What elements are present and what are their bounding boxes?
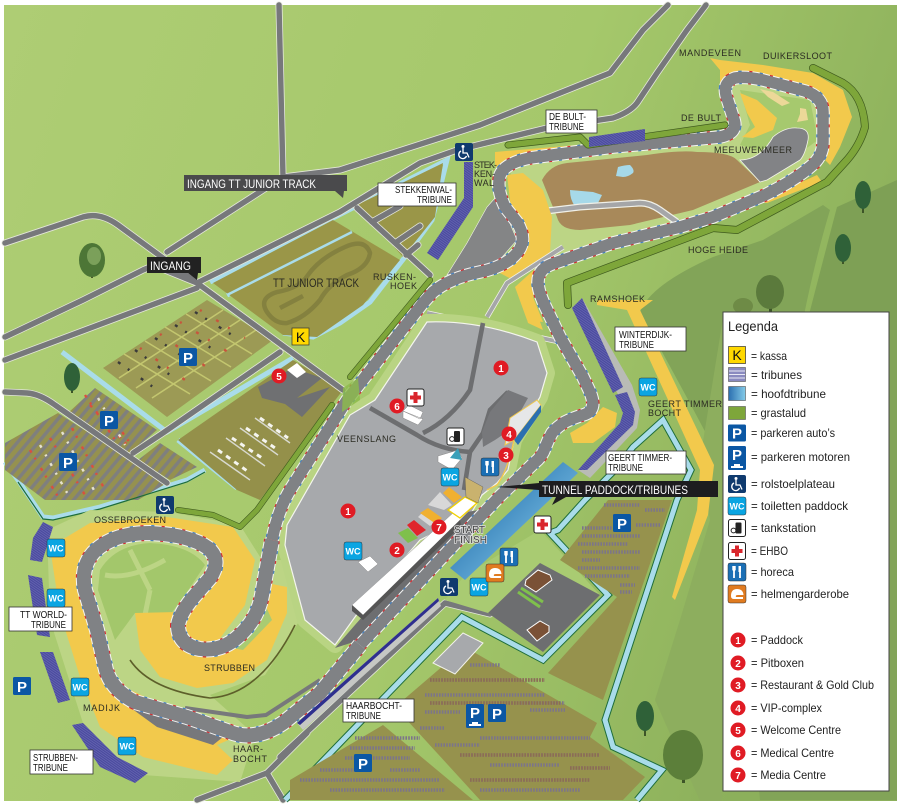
map icons [13,143,657,773]
legend: helmengarderobe [728,585,849,603]
icon: motor parking [466,704,484,728]
icon: WC: WC [48,544,64,554]
label: TT World-tribune: TT WORLD- [20,610,67,621]
label: TT World-tribune: TRIBUNE [31,620,66,631]
welcome centre building [287,363,306,378]
tribune: Stekkenwal [427,162,473,260]
legend: toiletten paddock [728,497,849,515]
yellow: outer [50,517,255,775]
legend: toiletten paddock: = toiletten paddock [751,499,849,513]
tribunes [28,129,645,783]
label: Haarbocht-tribune: TRIBUNE [346,711,381,722]
tower [465,477,483,503]
callout: Tunnel Paddock/Tribunes [497,481,718,505]
canal: left [5,352,293,518]
legend: rolstoelplateau: = rolstoelplateau [751,477,835,491]
legend: kassa: K [732,347,742,363]
callout: Ingang TT Junior Track [184,175,347,198]
welcome centre apron [258,368,330,417]
paddock [285,322,547,648]
legend: parkeren motoren [728,446,850,470]
parking lot west 3 [138,443,197,480]
legend: Medical Centre: = Medical Centre [751,746,834,760]
trees [64,181,871,783]
legend: parkeren auto's: P [732,426,742,442]
marker 2: 2 [394,546,400,557]
tribune: TT World 1 [30,522,53,562]
label: Ramshoek: RAMSHOEK [590,294,645,304]
asphalt Strubben [84,533,360,735]
label: Winterdijk-tribune: TRIBUNE [619,340,654,351]
legend: helmengarderobe: = helmengarderobe [751,587,849,601]
legend: rolstoelplateau [728,475,835,493]
legend: VIP-complex: 4 [735,704,741,715]
legend: horeca: = horeca [751,565,794,579]
lot: Stekkenwal [357,163,443,257]
icon: WC [639,378,657,396]
white building 6 [403,405,423,425]
icon: first aid [407,389,424,406]
label: Start/finish: START [454,525,485,536]
grass banks [178,68,865,527]
icon: parking [179,348,197,367]
road: thin east [427,247,563,342]
lot south-west [290,725,473,800]
tree 5 [756,275,784,313]
label: Meeuwenmeer: MEEUWENMEER [714,145,792,155]
label: Geert Timmer-tribune: TRIBUNE [608,463,643,474]
label: Ossebroeken: OSSEBROEKEN [94,515,166,525]
marker 6: 6 [394,402,400,413]
number markers [272,360,516,558]
hills [640,180,897,801]
marker 1 [340,504,356,518]
icon: parking [100,411,118,430]
legend: Media Centre: 7 [735,771,741,782]
label: Rusken-hoek: HOEK [390,281,417,291]
icon: parking [354,754,372,773]
icon: kassa [292,328,309,345]
cars north [118,312,240,392]
fuel building [438,450,462,470]
legend: Paddock [730,632,804,648]
legend: tribunes: = tribunes [751,368,802,382]
legend: EHBO [728,542,788,560]
icon: WC: WC [472,582,487,592]
tree 6 [636,701,654,736]
icon: wheelchair [440,578,458,596]
label: De Bult-tribune: TRIBUNE [549,122,584,133]
legend: Restaurant and Gold Club: 3 [735,681,741,692]
parking lanes [210,418,290,480]
icon: parking: P [17,679,27,696]
label: Haarbocht-tribune [343,699,414,722]
marker 2 [390,542,404,558]
water [570,165,634,206]
legend: Medical Centre: 6 [735,749,741,760]
legend: kassa: = kassa [751,349,787,363]
legend: grastalud [728,406,806,420]
building brown 2 [527,621,549,641]
callout: Ingang [147,257,201,280]
legend: Paddock: 1 [735,636,741,647]
icon: parking: P [183,350,193,367]
icon: WC: WC [640,382,656,392]
light surround [47,510,300,782]
yellow: Stekkenwal [495,145,578,330]
VIP complex [505,400,541,445]
pit boxes [398,528,418,543]
kerbs [84,77,823,735]
label: Stek-ken-wal: KEN- [474,169,495,179]
yellow: lower [757,175,822,203]
helipad [433,633,483,674]
label: Start/finish: FINISH [454,535,487,546]
callout: Tunnel Paddock/Tribunes: TUNNEL PADDOCK/TRIBUNES [542,483,688,497]
icon: wheelchair [156,496,174,514]
motor clusters east [578,505,665,592]
label: Strubben-tribune: TRIBUNE [33,763,68,774]
sand [760,89,808,122]
tree 3 [855,181,871,213]
icon: parking: P [492,706,502,723]
yellow: north-east [710,58,852,165]
icon: parking [613,514,631,533]
lot: TT Junior track [213,220,400,337]
paddock surround [285,322,547,645]
legend: parkeren auto's [728,424,835,442]
label: Hoge Heide: HOGE HEIDE [688,245,748,255]
marker 4: 4 [506,430,512,441]
wc building [358,556,378,572]
icon: food [500,548,518,566]
icon: WC: WC [72,682,88,692]
label: Haar-bocht: HAAR- [233,744,263,754]
label: Stek-ken-wal: WAL [474,178,494,188]
tribune: Strubben [72,723,148,783]
marker 1: 1 [498,364,504,375]
callout: Ingang TT Junior Track: INGANG TT JUNIOR TRACK [187,177,316,191]
kerbs Strubben [84,533,360,735]
yellow: inner [135,583,287,688]
marker 5 [272,368,286,384]
label: Madijk: MADIJK [83,703,120,713]
icon: parking: P [617,516,627,533]
marker 5: 5 [276,372,282,383]
label: Geert Timmer bocht [648,399,722,418]
green patch [233,600,272,650]
label: TT World-tribune [9,607,72,631]
legend: parkeren motoren: = parkeren motoren [751,450,850,464]
legend: horeca [728,563,794,581]
track road [513,203,677,222]
canal: south-east [285,420,691,800]
legend: Paddock: = Paddock [751,633,804,647]
gray lake Stekkenwal [447,198,517,275]
lot: welcome centre [178,360,343,500]
icon: parking: P [358,756,368,773]
inner streaks [105,550,165,615]
cars west [30,395,135,500]
tree 7 [663,730,703,783]
icon: WC: WC [442,472,458,482]
label: Haarbocht-tribune: HAARBOCHT- [346,701,402,712]
dark bank [130,625,295,698]
icon: wheelchair [455,143,473,161]
lots south-east [290,500,672,800]
tribune: TT World 2 [28,575,50,637]
label: Geert Timmer-tribune [606,451,686,474]
legend: tankstation [728,520,816,536]
restaurant band [487,440,514,490]
pit wedge [120,700,223,745]
icon: WC [47,589,65,607]
label: TT Junior Track: TT JUNIOR TRACK [273,278,359,290]
legend title: Legenda [728,318,778,334]
brown area [542,151,760,230]
tree 1 [79,243,105,278]
icon: fuel [447,428,464,445]
legend: toiletten paddock: WC [730,502,745,512]
label: Veenslang: VEENSLANG [337,434,396,444]
label: De Bult-tribune: DE BULT- [549,112,586,123]
motor clusters south-west [300,738,445,790]
label: Stek-ken-wal: STEK- [474,160,497,170]
icon: WC: WC [346,546,361,556]
label: Geert Timmer bocht: BOCHT [648,408,682,418]
label: Stekkenwal-tribune [378,183,456,206]
icon: kassa: K [296,329,306,345]
label: Mandeveen: MANDEVEEN [679,48,741,58]
icon: WC: WC [48,594,64,604]
icon: first aid [534,516,551,533]
light green inner [740,90,818,160]
icon: food [481,458,499,476]
icon: WC [71,678,89,696]
icon: WC [470,578,488,596]
canal edge west [18,472,205,520]
marker 3 [498,448,514,462]
legend: EHBO: = EHBO [751,544,788,558]
legend: VIP-complex: = VIP-complex [751,701,822,715]
yellow: Geert Timmer [570,407,617,443]
green plaza [445,530,600,652]
label: Geert Timmer-tribune: GEERT TIMMER- [608,453,672,464]
paddock roads [370,323,508,490]
legend: kassa [728,346,787,364]
label: De Bult: DE BULT [681,113,722,123]
icon: helmet [486,564,504,582]
tree 4 [835,234,851,264]
icon: WC: WC [120,742,135,752]
legend: tankstation: = tankstation [751,521,816,535]
tribune labels [9,110,686,774]
infield NE [427,58,852,600]
motor clusters south [420,665,610,790]
marker 6 [390,398,404,414]
legend: hoofdtribune: = hoofdtribune [751,387,826,401]
parked vehicles [218,418,288,473]
icon: WC [344,542,362,560]
yellow: inner [740,93,777,138]
legend: VIP-complex [730,700,822,716]
legend: parkeren motoren: P [732,447,742,464]
icon: WC [118,737,136,755]
icon: parking [13,677,31,696]
icon: parking: P [104,413,114,430]
canal inner strip [227,232,352,295]
pit apron [335,510,478,648]
icon: parking: P [63,455,73,472]
label: Haar-bocht: BOCHT [233,754,268,764]
legend: parkeren auto's: = parkeren auto’s [751,426,835,440]
tree 2 [64,363,80,393]
icon: WC [441,468,459,486]
marker 7 [432,520,446,534]
label: Strubben-tribune: STRUBBEN- [33,753,78,764]
label: Winterdijk-tribune [615,327,686,351]
parking lot west 2 [5,413,167,500]
marker 4 [502,426,516,442]
lot south [395,647,645,800]
media yellow [448,497,477,518]
green steps [518,588,543,607]
roads [5,5,706,800]
tribune: Winterdijk [572,298,640,478]
label: Winterdijk-tribune: WINTERDIJK- [619,330,672,341]
map labels [83,48,832,764]
inner green [98,543,205,640]
label: Duikersloot: DUIKERSLOOT [763,51,832,61]
tribune: TT World 3 [40,652,70,703]
pit building [352,497,477,615]
icon: motor parking: P [470,705,480,722]
marker 1: 1 [345,507,351,518]
legend: tribunes [728,368,802,382]
label: Stekkenwal-tribune: TRIBUNE [417,195,452,206]
icon: parking [488,704,506,723]
label: Rusken-hoek [373,272,417,291]
legend: Pitboxen [730,656,804,670]
legend: Pitboxen: 2 [735,659,741,670]
marker 3: 3 [503,451,509,462]
track [84,77,823,745]
junior track course [264,244,370,323]
lot east [548,500,672,700]
canals and lots [5,160,447,520]
tribune: De Bult [589,129,645,147]
label: Stek-ken-wal [474,160,497,188]
marker 1 [494,360,508,376]
tree 8 [733,298,753,314]
tribune: Geert Timmer [578,392,635,470]
label: Stekkenwal-tribune: STEKKENWAL- [395,185,452,196]
label: Haar-bocht [233,744,268,764]
Strubben infield [47,510,300,782]
label: Rusken-hoek: RUSKEN- [373,272,416,282]
yellow: Ramshoek strip [597,300,714,600]
legend: Pitboxen: = Pitboxen [751,656,804,670]
callout: Ingang: INGANG [150,259,191,273]
main grandstand [450,462,578,580]
legend: Restaurant and Gold Club: = Restaurant & Gold Club [751,678,874,692]
dark lot [482,390,528,447]
inner service road [185,680,320,717]
marker 7: 7 [436,523,442,534]
canal: junior track [210,160,447,337]
gray lake [740,128,808,182]
legend: Media Centre: = Media Centre [751,768,826,782]
legend: grastalud: = grastalud [751,406,806,420]
label: De Bult-tribune [546,110,597,133]
staff parking [488,563,600,652]
icon: parking [59,453,77,472]
building brown 1 [525,570,552,592]
legend: Media Centre [730,768,826,782]
legend: Welcome Centre: = Welcome Centre [751,723,841,737]
panel: legend [723,312,889,791]
label: Strubben-tribune [30,750,93,774]
label: Geert Timmer bocht: GEERT TIMMER [648,399,722,409]
legend: Welcome Centre: 5 [735,726,741,737]
label: Strubben: STRUBBEN [204,663,255,673]
paddock surface [285,322,547,645]
label: Start/finish [454,525,487,546]
parking lot west 1 [68,388,157,453]
parking lot north [103,300,273,417]
bridge patch [342,378,360,412]
tribune: Haarbocht [297,598,441,730]
icon: WC [47,539,65,557]
asphalt [84,77,823,735]
